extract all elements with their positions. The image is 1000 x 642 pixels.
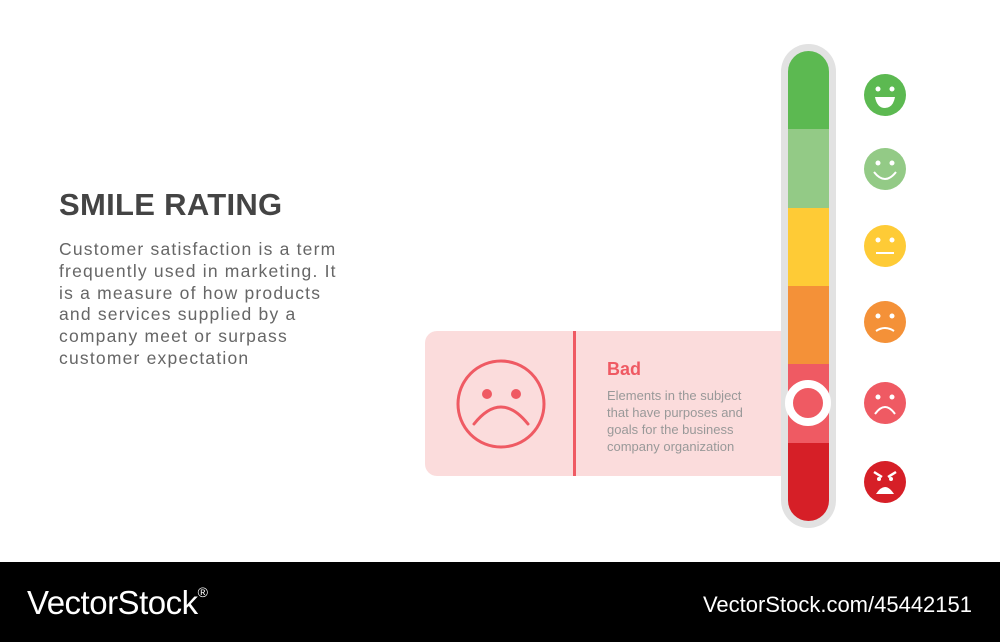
icon: sad [864,382,906,424]
icon: sad face outline [456,360,546,448]
description text: company meet or surpass [59,326,288,346]
card text [607,388,743,454]
card text: that have purposes and [607,405,743,420]
card text: company organization [607,439,734,454]
rating bar [781,44,836,528]
description text: Customer satisfaction is a term [59,239,336,259]
card text: goals for the business [607,422,733,437]
footer url: VectorStock.com/45442151 [703,592,972,617]
icon: slightly sad [864,301,906,343]
icon: very happy [864,74,906,116]
description text: is a measure of how products [59,283,321,303]
description text: and services supplied by a [59,304,296,324]
icon: neutral [864,225,906,267]
icon: happy [864,148,906,190]
heading: Bad: Bad [607,359,641,379]
description text: customer expectation [59,348,249,368]
title: SMILE RATING [59,187,282,222]
icon: angry [864,461,906,503]
emoji faces [864,74,906,503]
callout card: bad [425,331,790,476]
footer logo: VectorStock® [27,584,207,621]
divider [573,331,576,476]
description text [59,239,337,368]
description text: frequently used in marketing. It [59,261,337,281]
indicator knob [785,380,831,426]
card text: Elements in the subject [607,388,741,403]
footer bar [0,562,1000,642]
